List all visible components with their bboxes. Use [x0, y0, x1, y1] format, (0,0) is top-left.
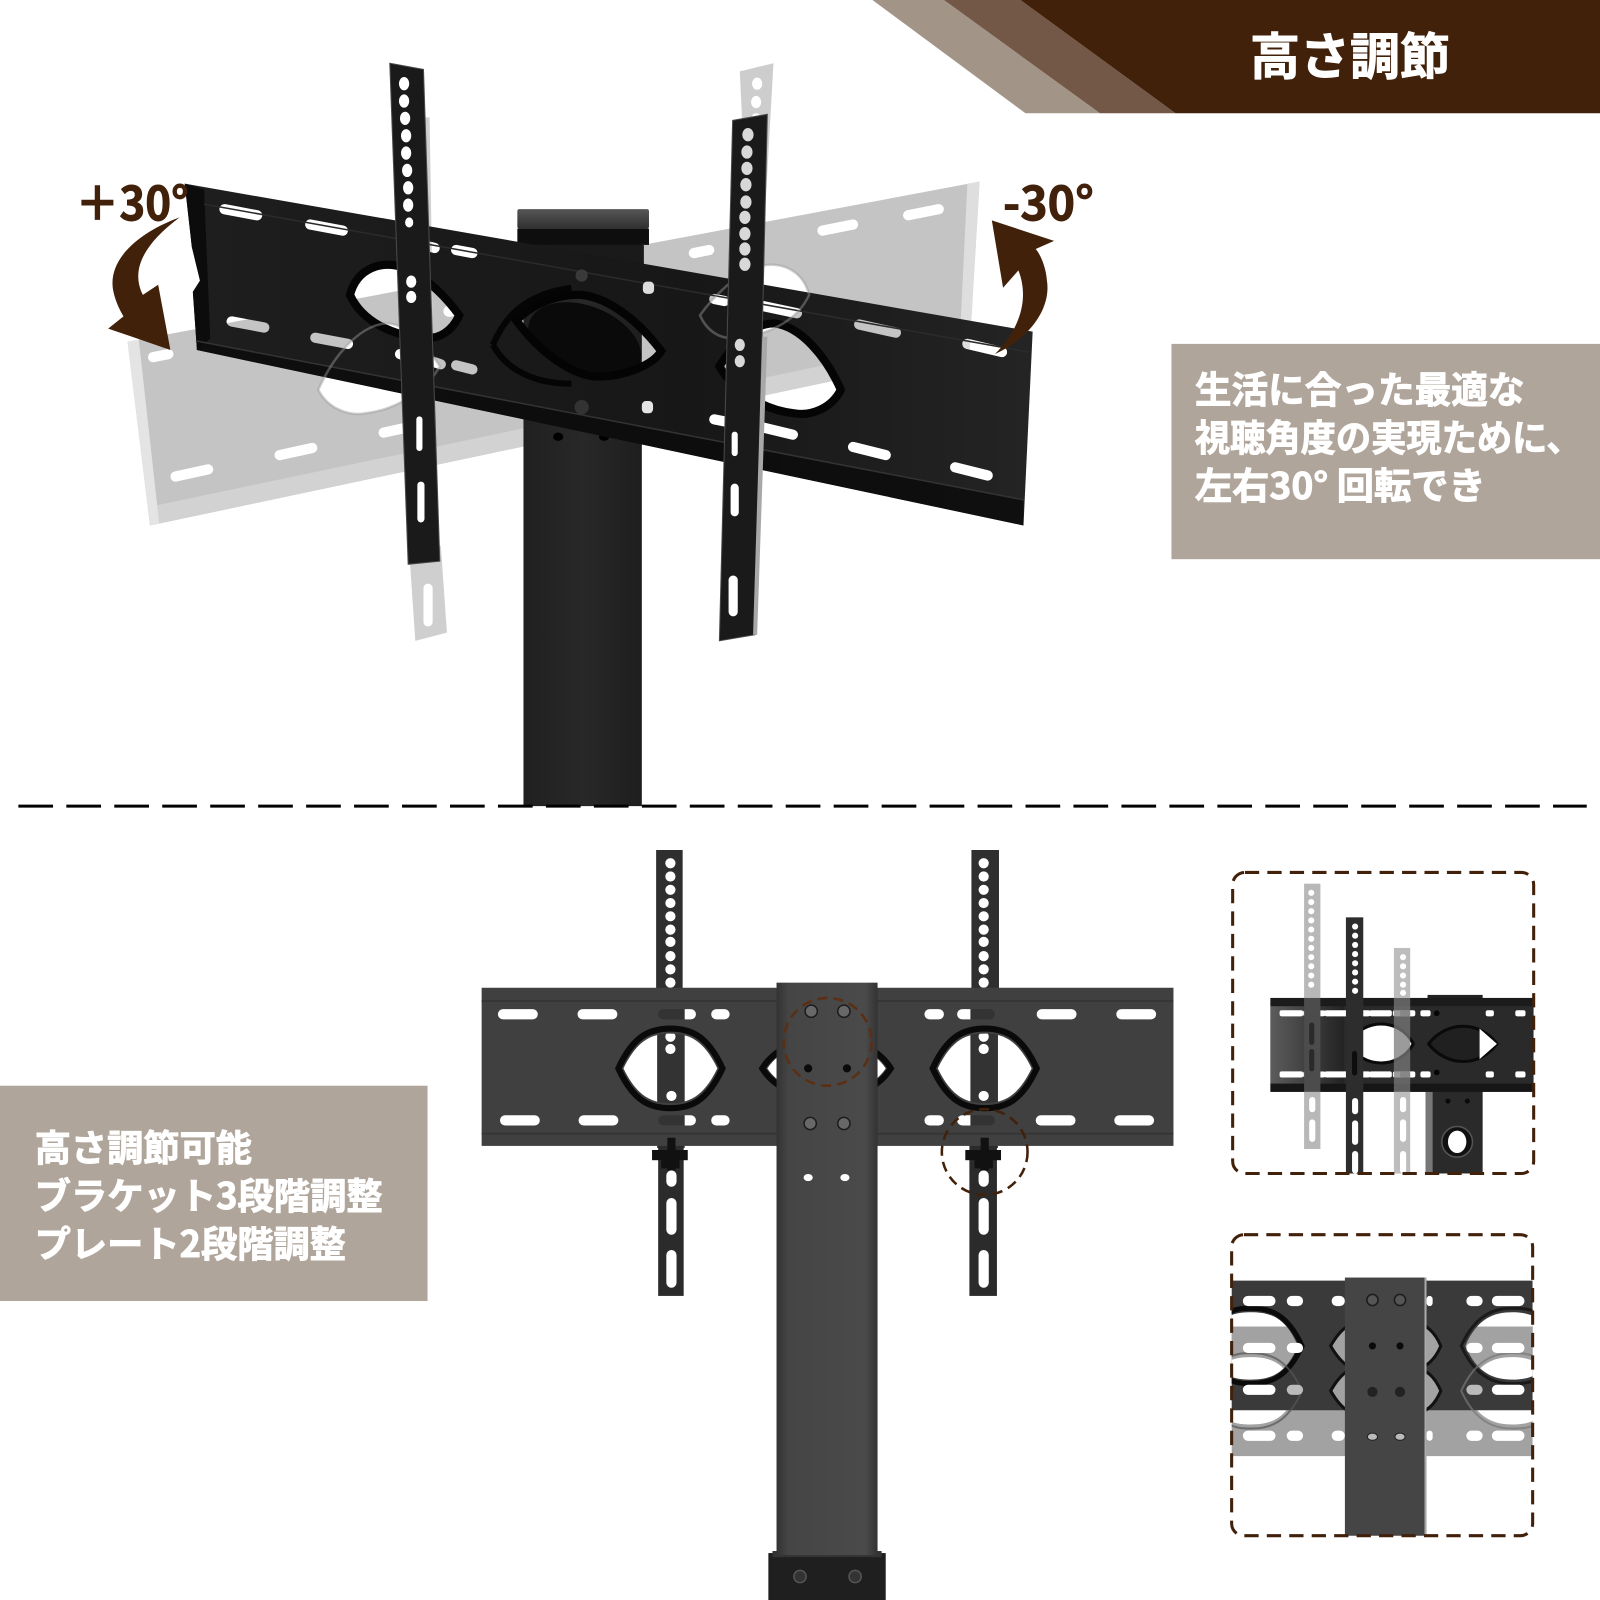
pillar — [516, 209, 653, 806]
arrow: minus 30 degrees — [992, 220, 1054, 354]
front pillar — [777, 983, 878, 1555]
clamp left — [652, 1138, 688, 1170]
arrow: plus 30 degrees — [108, 217, 180, 350]
panel: rotation text: 生活に合った最適な — [1195, 360, 1524, 414]
inset ghost bracket right — [1394, 948, 1410, 1178]
label: minus 30: -30° — [1003, 166, 1094, 234]
lower sleeve — [768, 1551, 886, 1600]
inset active bracket — [1346, 917, 1363, 1178]
bracket left — [390, 63, 440, 564]
panel: height text: 高さ調節可能 — [35, 1120, 252, 1172]
inset: bracket height positions — [1233, 872, 1534, 1182]
label: plus 30: ＋30° — [76, 166, 189, 234]
panel: height text — [0, 1086, 428, 1301]
rotation illustration — [128, 63, 1033, 806]
bracket right — [719, 114, 767, 641]
front mounting plate — [482, 988, 1173, 1146]
tilted mounting plate — [185, 184, 1033, 526]
clamp right — [965, 1138, 1001, 1170]
dashed circle: clamp — [942, 1109, 1028, 1195]
bracket front right — [969, 850, 999, 1296]
inset plate — [1270, 998, 1534, 1092]
inset black plate — [1232, 1280, 1533, 1441]
front view illustration — [482, 850, 1173, 1600]
panel: rotation text: 視聴角度の実現ために、 — [1195, 408, 1582, 462]
inset pillar — [1426, 995, 1483, 1182]
ghost bracket left — [409, 117, 447, 641]
inset ghost bracket left — [1304, 884, 1320, 1149]
dashed circle: pillar holes — [784, 998, 871, 1086]
panel: height text: ブラケット3段階調整 — [35, 1168, 383, 1220]
ghost plate rotated other way — [128, 182, 980, 526]
inset pillar front — [1345, 1278, 1427, 1539]
bracket front left — [656, 850, 685, 1296]
heading: 高さ調節 — [1250, 17, 1450, 89]
inset ghost plate — [1232, 1326, 1533, 1456]
inset: plate height positions — [1230, 1233, 1534, 1538]
panel: rotation text — [1171, 344, 1600, 559]
panel: height text: プレート2段階調整 — [35, 1216, 346, 1268]
panel: rotation text: 左右30° 回転でき — [1195, 456, 1486, 510]
header banner — [872, 0, 1600, 113]
ghost bracket right — [740, 63, 773, 245]
